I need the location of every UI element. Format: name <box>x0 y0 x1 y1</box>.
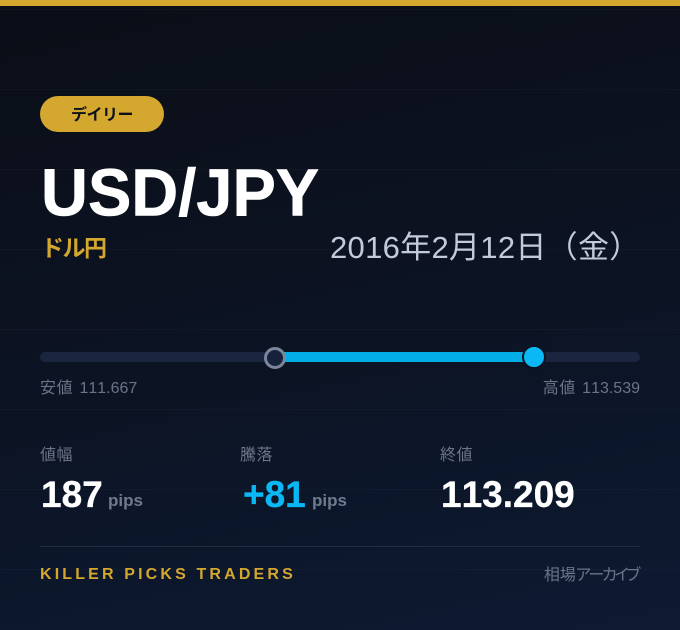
low label: 安値 111.667 <box>40 380 137 397</box>
stat: change <box>240 446 347 515</box>
stat: range <box>40 446 143 515</box>
slider active range <box>275 352 534 362</box>
high marker <box>522 345 546 369</box>
slider track <box>40 352 640 362</box>
badge: daily: デイリー <box>71 107 133 124</box>
stat value: 187 <box>41 474 103 515</box>
stat label: 値幅 <box>40 447 73 464</box>
title: currency pair: USD/JPY <box>41 155 319 230</box>
stat value: 113.209 <box>441 474 575 515</box>
footer brand: KILLER PICKS TRADERS <box>40 566 296 583</box>
top gold bar <box>0 0 680 6</box>
stat: close <box>440 446 575 515</box>
badge: daily <box>40 96 164 132</box>
subtitle: Japanese pair name: ドル円 <box>41 235 106 261</box>
stat label: 騰落 <box>240 447 273 464</box>
stat unit: pips <box>108 491 143 510</box>
range slider <box>40 347 640 369</box>
stat label: 終値 <box>440 447 473 464</box>
high label: 高値 113.539 <box>543 380 640 397</box>
date: 2016年2月12日（金） <box>330 230 641 265</box>
stat unit: pips <box>312 491 347 510</box>
footer link: 相場アーカイブ <box>544 567 638 584</box>
low marker <box>264 347 286 369</box>
stat value: +81 <box>243 474 306 515</box>
